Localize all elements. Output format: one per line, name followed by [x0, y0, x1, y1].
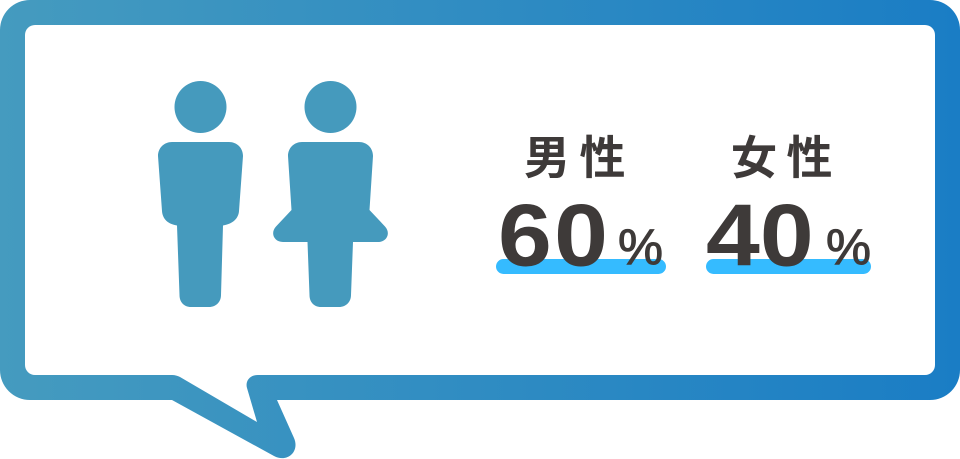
percent sign: female: %: [826, 219, 871, 275]
value: male 60 percent: 60: [498, 186, 608, 285]
underline: male: [496, 259, 666, 274]
icon: man: [158, 81, 243, 307]
label: female: 女性: [731, 132, 842, 184]
female statistic: [706, 132, 871, 285]
male statistic: [496, 132, 666, 285]
percent sign: male: %: [618, 219, 663, 275]
icon: woman: [273, 81, 388, 307]
value: female 40 percent: 40: [706, 186, 814, 285]
label: male: 男性: [524, 132, 635, 184]
underline: female: [706, 259, 871, 274]
